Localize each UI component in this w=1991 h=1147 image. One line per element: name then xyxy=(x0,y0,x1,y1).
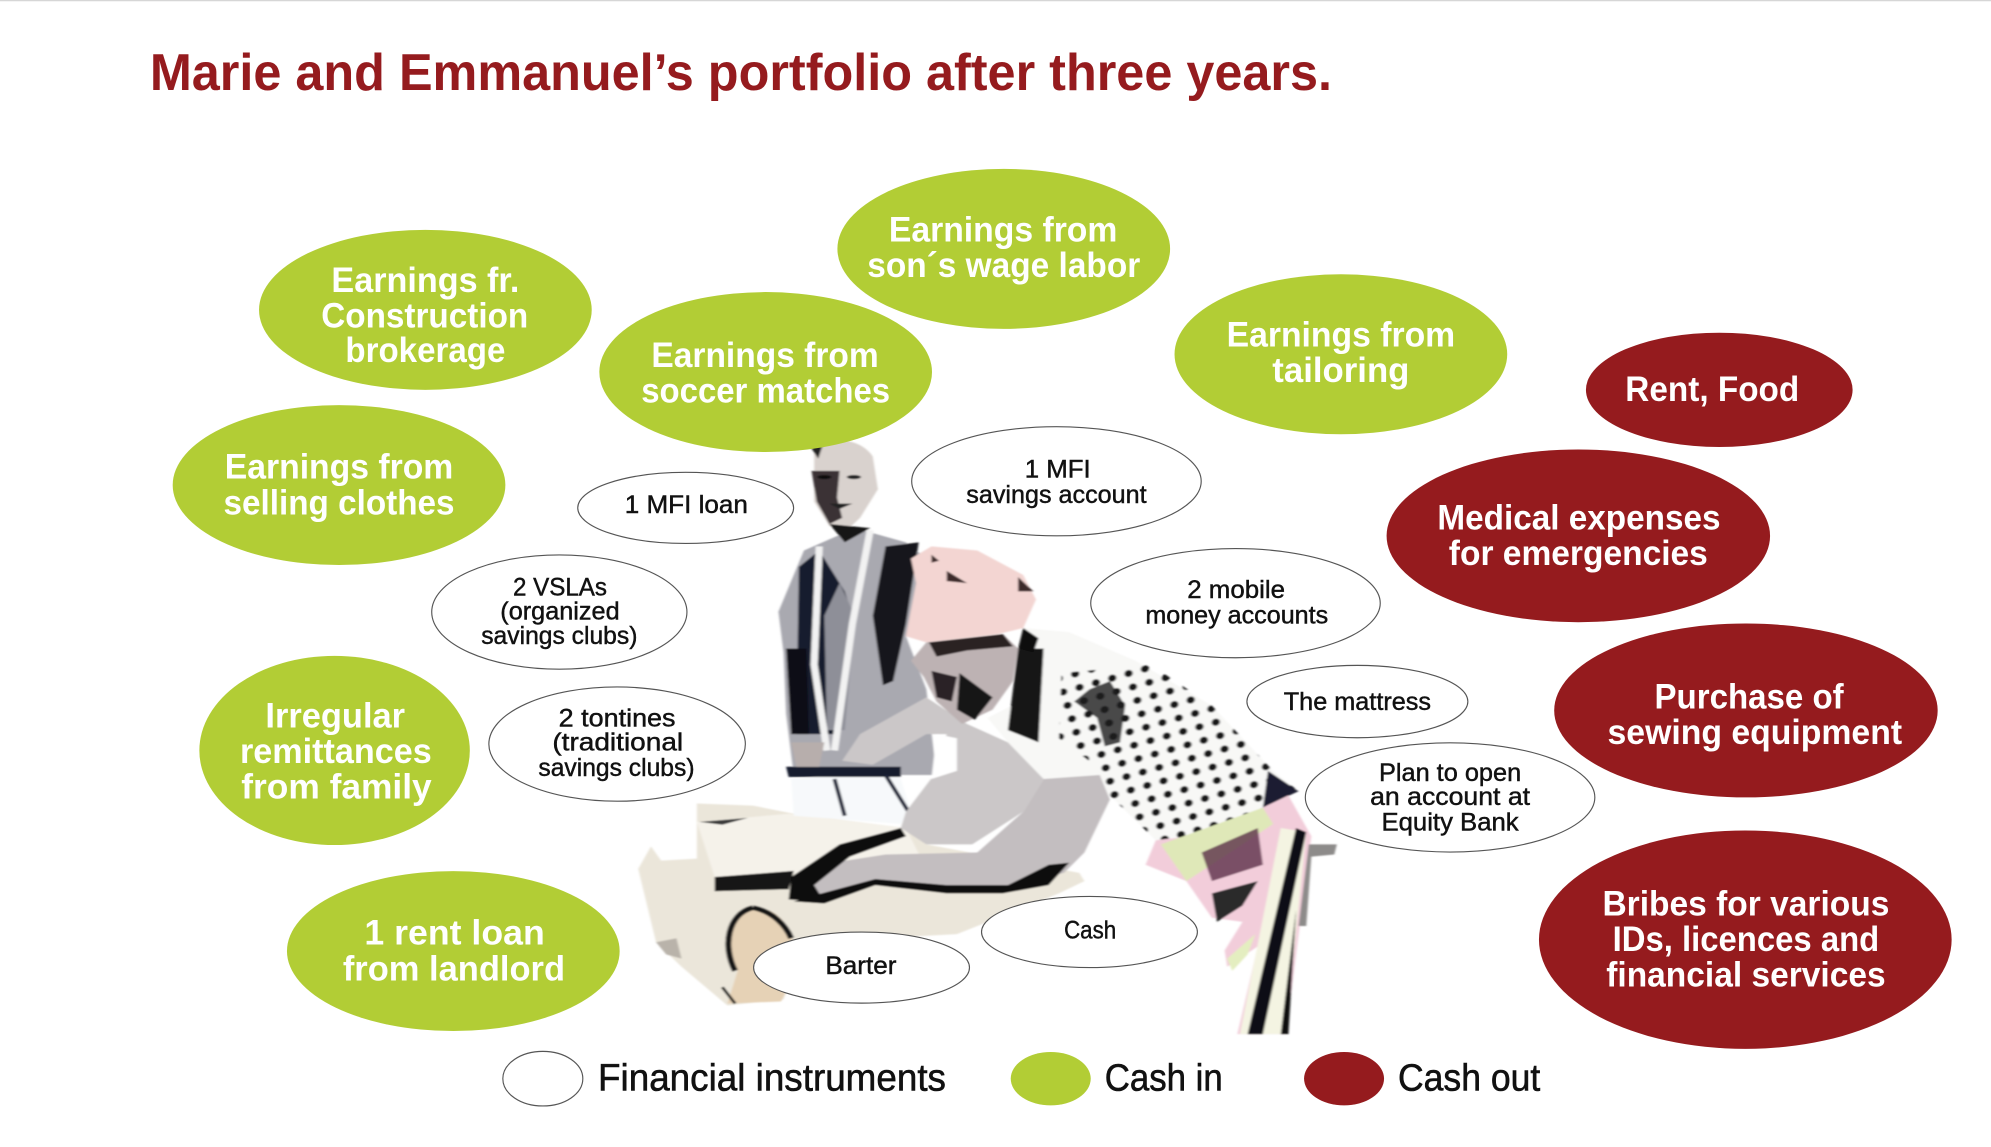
cash out: Bribes xyxy=(1539,830,1952,1049)
table and cloth xyxy=(638,804,1084,1006)
instrument: 2 VSLAs: (organized xyxy=(500,599,620,626)
cash in: Earnings fr. Construction brokerage: brokerage xyxy=(345,330,505,370)
cash out: Rent, Food xyxy=(1586,333,1853,447)
cash in: Earnings from selling clothes: Earnings from xyxy=(225,447,453,487)
legend item: Financial instruments xyxy=(503,1051,946,1106)
instrument: 2 tontines xyxy=(489,687,745,801)
cash in: Earnings from tailoring xyxy=(1175,274,1507,434)
cash in: Earnings from soccer matches: Earnings from xyxy=(651,335,879,375)
cash in: Earnings from tailoring: Earnings from xyxy=(1227,315,1455,355)
instrument: 1 MFI loan xyxy=(578,472,794,543)
woman: skirt xyxy=(1146,795,1311,1034)
instrument: Cash: Cash xyxy=(1064,917,1116,944)
instrument: 1 MFI loan: 1 MFI loan xyxy=(625,492,748,519)
cash in: Irregular remittances from family xyxy=(199,656,470,845)
instrument: Plan to open an account at Equity Bank: an account at xyxy=(1370,784,1530,811)
instrument: 2 VSLAs xyxy=(432,555,687,669)
fabric roll xyxy=(727,908,799,1004)
instrument: Barter: Barter xyxy=(825,953,896,980)
cash in: Irregular remittances from family: remittances xyxy=(240,731,432,771)
cash out: Medical expenses for emergencies: for emergencies xyxy=(1449,533,1708,573)
cash in: 1 rent loan from landlord: 1 rent loan xyxy=(364,913,545,953)
instrument: Plan to open an account at Equity Bank: Equity Bank xyxy=(1382,809,1519,836)
instrument: 2 tontines: savings clubs) xyxy=(538,755,695,782)
table edge at right xyxy=(1299,844,1337,926)
instrument: Barter xyxy=(754,932,969,1003)
cash in: Earnings fr. Construction brokerage: Construction xyxy=(321,296,528,336)
cash out: Purchase of sewing equipment xyxy=(1554,623,1938,797)
instrument: The mattress: The mattress xyxy=(1284,689,1431,716)
man: shirt xyxy=(778,528,937,775)
title: Marie and Emmanuel’s portfolio after three years. xyxy=(150,44,1332,102)
cash in: Earnings fr. Construction brokerage: Earnings fr. xyxy=(331,260,519,300)
cash in: Irregular remittances from family: Irregular xyxy=(265,696,405,736)
instrument: Plan to open an account at Equity Bank xyxy=(1305,743,1595,852)
cash out: Bribes: IDs, licences and xyxy=(1613,919,1879,959)
cash out: Purchase of sewing equipment: Purchase of xyxy=(1655,677,1844,717)
instrument: 2 tontines: 2 tontines xyxy=(559,705,676,732)
instrument: 2 mobile money accounts: 2 mobile xyxy=(1187,577,1285,604)
cash in: Earnings from son's wage labor xyxy=(837,169,1170,329)
cash in: 1 rent loan from landlord xyxy=(287,871,620,1031)
man: waist and shorts xyxy=(791,771,911,824)
cash in: Irregular remittances from family: from family xyxy=(241,767,432,807)
legend item: Cash in xyxy=(1011,1052,1223,1105)
instrument: 1 MFI savings account: savings account xyxy=(966,482,1147,509)
cash out: Bribes: financial services xyxy=(1606,955,1886,995)
cash in: Earnings fr. Construction brokerage xyxy=(259,230,592,390)
woman: arms xyxy=(842,697,1044,844)
legend item: Financial instruments: Financial instruments xyxy=(598,1058,946,1100)
man: head xyxy=(814,440,878,532)
cash out: Medical expenses for emergencies xyxy=(1387,450,1770,622)
cash in: Earnings from son's wage labor: Earnings from xyxy=(889,209,1117,249)
cash out: Medical expenses for emergencies: Medical expenses xyxy=(1437,498,1721,538)
cash out: Bribes: Bribes for various xyxy=(1602,884,1889,924)
cash in: Earnings from tailoring: tailoring xyxy=(1272,350,1409,390)
instrument: The mattress xyxy=(1247,665,1468,738)
instrument: Cash xyxy=(982,896,1197,968)
woman: head wrap and face xyxy=(906,546,1036,642)
cash in: Earnings from selling clothes: selling clothes xyxy=(223,482,455,522)
legend xyxy=(503,1051,1541,1106)
instrument: 2 VSLAs: 2 VSLAs xyxy=(513,575,607,602)
woman: shirt xyxy=(988,628,1299,840)
cash in: Earnings from selling clothes xyxy=(173,405,505,565)
instrument: 2 VSLAs: savings clubs) xyxy=(481,623,637,650)
legend item: Cash in: Cash in xyxy=(1105,1058,1223,1100)
legend item: Cash out: Cash out xyxy=(1398,1058,1541,1100)
photo: Marie and Emmanuel at the tailoring table xyxy=(638,440,1337,1034)
cash out: Rent, Food: Rent, Food xyxy=(1625,369,1799,409)
instrument: Plan to open an account at Equity Bank: Plan to open xyxy=(1379,760,1521,787)
cash out: Purchase of sewing equipment: sewing equipment xyxy=(1608,712,1902,752)
instrument: 1 MFI savings account xyxy=(912,427,1201,536)
legend item: Cash out xyxy=(1304,1052,1541,1105)
cash in: Earnings from soccer matches xyxy=(599,292,932,452)
instrument: 2 mobile money accounts xyxy=(1091,549,1380,658)
cash in: 1 rent loan from landlord: from landlord xyxy=(343,948,565,988)
cash in: Earnings from son's wage labor: son´s wage labor xyxy=(867,245,1140,285)
cash in: Earnings from soccer matches: soccer matches xyxy=(641,371,890,411)
instrument: 1 MFI savings account: 1 MFI xyxy=(1025,456,1091,483)
instrument: 2 tontines: (traditional xyxy=(552,729,683,756)
instrument: 2 mobile money accounts: money accounts xyxy=(1145,602,1328,629)
